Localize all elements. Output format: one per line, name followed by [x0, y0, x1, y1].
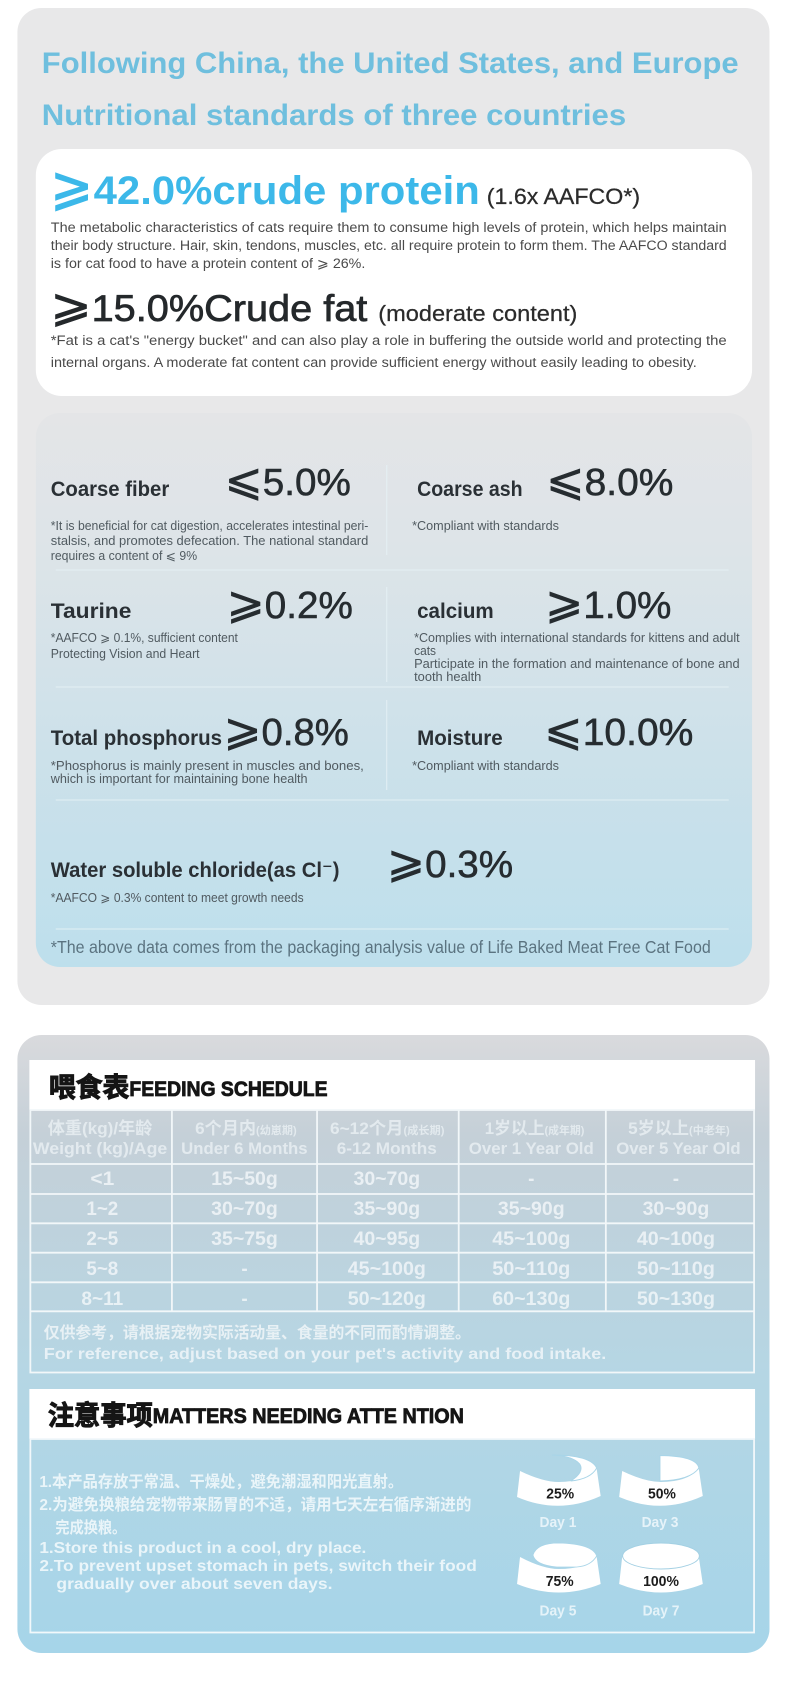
icon: bowl day 7: 100% [643, 1573, 679, 1590]
table note [44, 1323, 606, 1363]
item: moisture: ⩽10.0% [544, 704, 693, 755]
fat comparison note: (moderate content) [378, 301, 577, 326]
table header row [33, 1118, 741, 1158]
item: water soluble chloride [51, 836, 513, 905]
item: taurine: ⩾0.2% [226, 577, 353, 628]
table data rows: 50~110g [492, 1259, 570, 1280]
item: total phosphorus: Total phosphorus [51, 727, 222, 750]
icon: bowl day 1: 25% [546, 1486, 574, 1503]
feeding table [30, 1110, 755, 1372]
table data rows: 2~5 [86, 1229, 118, 1250]
item: total phosphorus: ⩾0.8% [223, 704, 349, 755]
item: coarse ash: *Compliant with standards [412, 519, 559, 533]
table data rows: 40~100g [637, 1229, 715, 1250]
icon: bowl day 5 [517, 1543, 601, 1620]
heading: matters needing attention: 注意事项 [48, 1401, 153, 1431]
table data rows: 60~130g [492, 1289, 570, 1310]
table header row: Under 6 Months [181, 1139, 308, 1158]
item: moisture: *Compliant with standards [412, 759, 559, 773]
panel: other nutrients [36, 413, 752, 967]
protein description: The metabolic characteristics of cats require them to consume high levels of protein, which helps maintain [51, 219, 727, 235]
table data rows: 45~100g [348, 1259, 426, 1280]
item: calcium: *Complies with international standards for kittens and adult [414, 631, 740, 645]
icon: bowl day 5: 75% [546, 1573, 574, 1590]
item: water soluble chloride: Water soluble chloride(as Cl⁻) [51, 859, 339, 882]
item: calcium [414, 577, 740, 684]
table data rows: 30~90g [643, 1199, 709, 1220]
attention instructions: 完成换粮。 [55, 1518, 126, 1537]
table header row: 6~12个月(成长期) [330, 1119, 445, 1138]
item: taurine: Taurine [51, 600, 131, 623]
table data rows: 30~70g [353, 1169, 420, 1190]
table header row: Over 5 Year Old [616, 1139, 741, 1158]
item: coarse fiber: requires a content of ⩽ 9% [51, 549, 197, 563]
item: coarse fiber: *It is beneficial for cat digestion, accelerates intestinal peri- [51, 519, 368, 533]
table data rows: 50~120g [348, 1289, 426, 1310]
item: coarse fiber: ⩽5.0% [224, 454, 351, 505]
table header row: Weight (kg)/Age [33, 1139, 167, 1158]
attention instructions [39, 1472, 477, 1593]
icon: bowl day 7: Day 7 [643, 1603, 679, 1620]
fat description: *Fat is a cat's "energy bucket" and can also play a role in buffering the outside world and protecting the [51, 332, 727, 348]
table data rows: 1~2 [86, 1199, 118, 1220]
fat description: internal organs. A moderate fat content can provide sufficient energy without easily leading to obesity. [51, 354, 697, 370]
icon: bowl day 3 [619, 1456, 703, 1531]
protein description [51, 219, 727, 271]
table data rows: 50~130g [637, 1289, 715, 1310]
table data rows: 8~11 [81, 1289, 123, 1310]
item: taurine: *AAFCO ⩾ 0.1%, sufficient content [51, 631, 238, 645]
table data rows: - [241, 1259, 248, 1280]
crude fat value: ⩾15.0%Crude fat [50, 279, 367, 331]
heading: feeding schedule: FEEDING SCHEDULE [129, 1078, 328, 1101]
protein description: is for cat food to have a protein content of ⩾ 26%. [51, 255, 365, 271]
item: coarse ash: ⩽8.0% [546, 454, 673, 505]
table header row: 6-12 Months [337, 1139, 437, 1158]
table data rows: 40~95g [353, 1229, 420, 1250]
heading: matters needing attention [29, 1389, 755, 1439]
item: coarse fiber [51, 454, 368, 563]
icon: bowl day 5: Day 5 [540, 1603, 576, 1620]
icon: bowl day 1 [517, 1455, 601, 1531]
table data rows: - [241, 1289, 248, 1310]
table note: 仅供参考，请根据宠物实际活动量、食量的不同而酌情调整。 [44, 1323, 471, 1342]
table data rows: 15~50g [211, 1169, 278, 1190]
table header row: 1岁以上(成年期) [485, 1119, 585, 1138]
table note: For reference, adjust based on your pet's activity and food intake. [44, 1346, 606, 1363]
item: moisture [412, 704, 693, 773]
icon: bowl day 3: Day 3 [642, 1514, 678, 1531]
item: total phosphorus: *Phosphorus is mainly present in muscles and bones, [51, 759, 364, 773]
item: calcium: ⩾1.0% [545, 577, 671, 628]
heading: nutrition standards title [42, 47, 739, 132]
attention instructions: 2.为避免换粮给宠物带来肠胃的不适，请用七天左右循序渐进的 [39, 1495, 471, 1514]
panel: protein and fat card [36, 149, 752, 396]
icon: bowl day 3: 50% [648, 1486, 676, 1503]
crude protein value: ⩾42.0%crude protein [50, 159, 480, 215]
item: taurine [51, 577, 353, 661]
table header row: 5岁以上(中老年) [628, 1119, 730, 1138]
heading: matters needing attention: MATTERS NEEDING ATTE NTION [153, 1405, 464, 1428]
panel: feeding and attention [17, 1035, 769, 1653]
item: coarse ash [412, 454, 673, 533]
item: coarse fiber: stalsis, and promotes defecation. The national standard [51, 534, 368, 548]
protein description: their body structure. Hair, skin, tendons, muscles, etc. all require protein to form them. The AAFCO standard [51, 237, 727, 253]
item: moisture: Moisture [417, 727, 503, 750]
table header row: 体重(kg)/年龄 [48, 1118, 152, 1138]
heading: nutrition standards title: Following China, the United States, and Europe [42, 47, 739, 80]
table data rows: 30~70g [211, 1199, 278, 1220]
item: calcium: Participate in the formation and maintenance of bone and [414, 657, 740, 671]
item: calcium: calcium [417, 600, 494, 623]
table data rows: <1 [90, 1169, 114, 1190]
attention instructions: 2.To prevent upset stomach in pets, switch their food [39, 1558, 477, 1575]
table data rows: - [673, 1169, 679, 1190]
table data rows: 5~8 [86, 1259, 118, 1280]
heading: nutrition standards title: Nutritional standards of three countries [42, 99, 626, 132]
table header row: Over 1 Year Old [469, 1139, 594, 1158]
attention instructions: 1.本产品存放于常温、干燥处，避免潮湿和阳光直射。 [39, 1472, 403, 1491]
item: coarse fiber: Coarse fiber [51, 478, 169, 501]
attention instructions: 1.Store this product in a cool, dry place. [39, 1540, 366, 1557]
table data rows: 35~90g [353, 1199, 420, 1220]
table data rows: 35~75g [211, 1229, 278, 1250]
data source footnote: *The above data comes from the packaging analysis value of Life Baked Meat Free Cat Food [51, 937, 711, 957]
table data rows: 45~100g [492, 1229, 570, 1250]
heading: feeding schedule [29, 1060, 755, 1110]
attention box [30, 1439, 754, 1632]
table data rows: - [528, 1169, 534, 1190]
item: total phosphorus: which is important for maintaining bone health [50, 772, 308, 786]
panel: nutrition standards [17, 8, 769, 1005]
table data rows: 50~110g [637, 1259, 715, 1280]
icon: bowl day 1: Day 1 [540, 1514, 576, 1531]
item: calcium: cats [414, 644, 436, 658]
item: calcium: tooth health [414, 670, 481, 684]
icon: bowl day 7 [619, 1543, 703, 1620]
protein comparison note: (1.6x AAFCO*) [487, 184, 640, 209]
item: water soluble chloride: *AAFCO ⩾ 0.3% content to meet growth needs [51, 891, 304, 905]
item: water soluble chloride: ⩾0.3% [387, 836, 513, 887]
attention instructions: gradually over about seven days. [56, 1576, 332, 1593]
item: coarse ash: Coarse ash [417, 478, 523, 501]
table data rows: 35~90g [498, 1199, 565, 1220]
heading: feeding schedule: 喂食表 [49, 1073, 129, 1103]
table header row: 6个月内(幼崽期) [195, 1119, 297, 1138]
item: total phosphorus [50, 704, 364, 786]
item: taurine: Protecting Vision and Heart [51, 647, 200, 661]
table data rows [81, 1169, 715, 1310]
fat description [51, 332, 727, 370]
